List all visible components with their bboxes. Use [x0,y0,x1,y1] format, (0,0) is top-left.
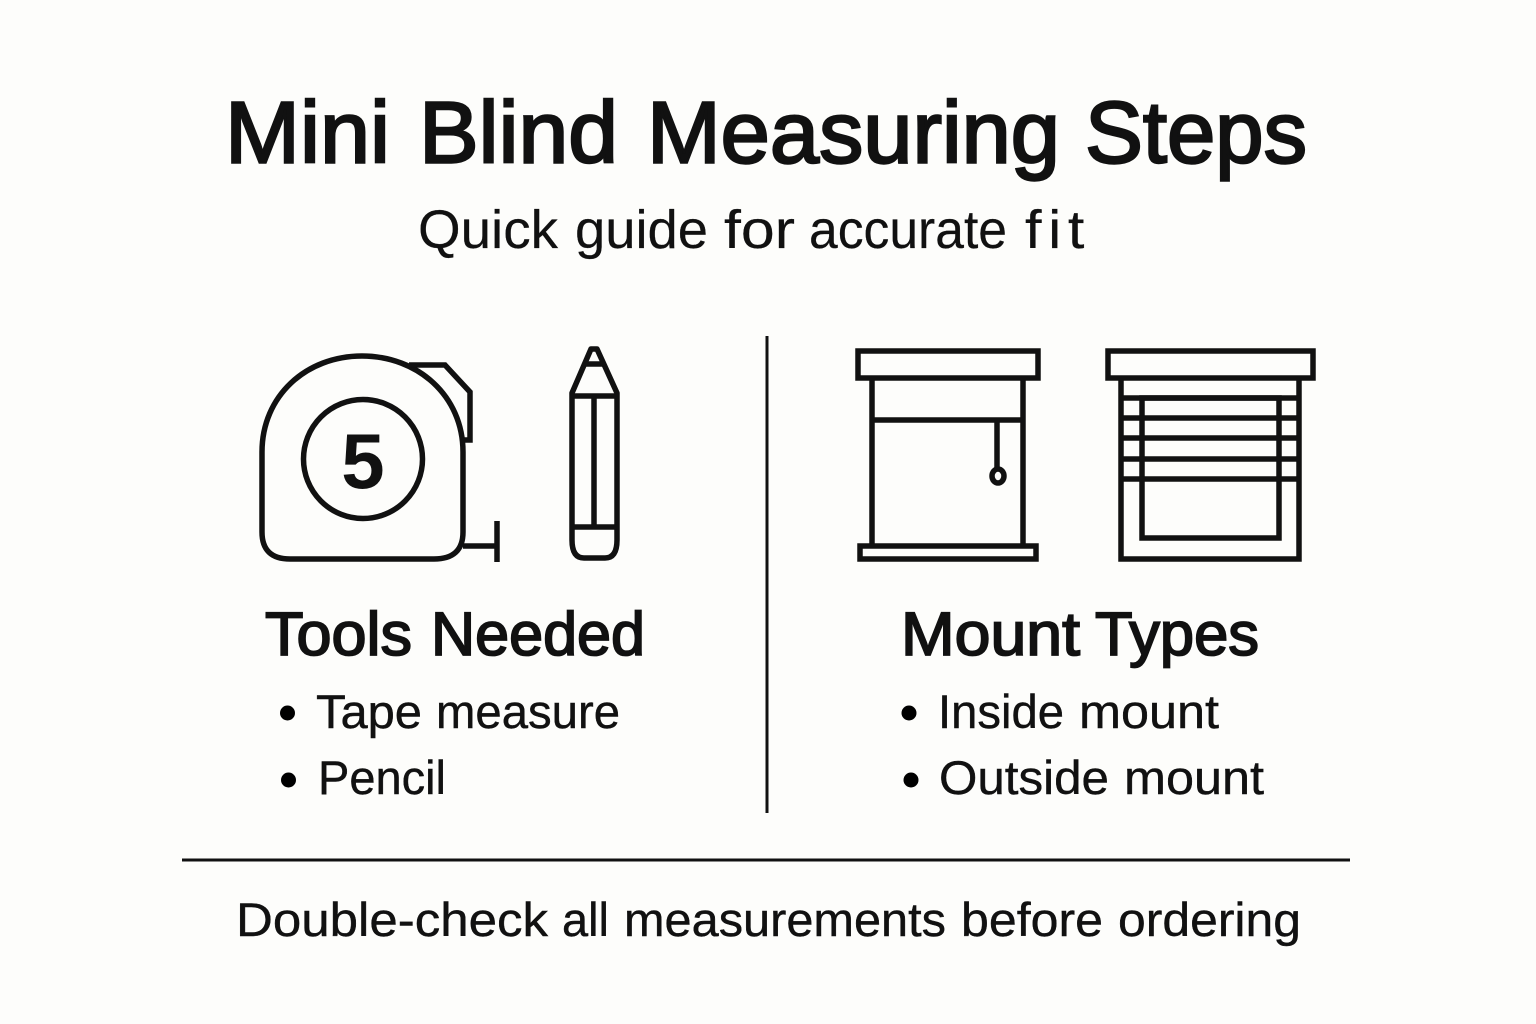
list: tools [280,685,620,804]
list: tools: Pencil [318,751,446,804]
list: mounts: mount [1124,751,1264,804]
panel: tools needed [262,349,645,804]
icon: pencil [572,349,617,558]
heading: mount types: Mount [901,600,1080,668]
icon: outside mount blind [1108,351,1313,559]
list: tools: measure [436,685,620,738]
footer note [236,893,1301,946]
title [225,84,1307,182]
title: Blind [419,84,618,182]
icon: inside mount blind [858,351,1038,559]
heading: tools needed [265,600,645,668]
footer note: ordering [1118,893,1301,946]
subtitle [418,200,1091,260]
subtitle: Quick [418,200,559,260]
subtitle: for [724,200,795,260]
heading: mount types [901,600,1259,668]
heading: tools needed: Tools [265,600,412,668]
subtitle: accurate [809,200,1007,260]
footer note: Double-check [236,893,549,946]
heading: tools needed: Needed [431,600,645,668]
list: mounts [902,685,1264,804]
subtitle: fit [1025,200,1091,260]
divider: vertical [766,336,768,813]
list: mounts: Outside [939,751,1109,804]
heading: mount types: Types [1095,600,1259,668]
footer note: before [961,893,1103,946]
panel: mount types [858,351,1313,804]
icon: tape measure [262,356,497,562]
title: Steps [1085,84,1307,182]
footer note: all [562,893,609,946]
title: Mini [225,84,390,182]
list: mounts: mount [1079,685,1219,738]
divider: horizontal [182,858,1350,862]
list: mounts: Inside [938,685,1064,738]
footer note: measurements [624,893,946,946]
icon: tape measure: 5 [341,417,385,505]
subtitle: guide [575,200,708,260]
list: tools: Tape [316,685,422,738]
title: Measuring [647,84,1060,182]
